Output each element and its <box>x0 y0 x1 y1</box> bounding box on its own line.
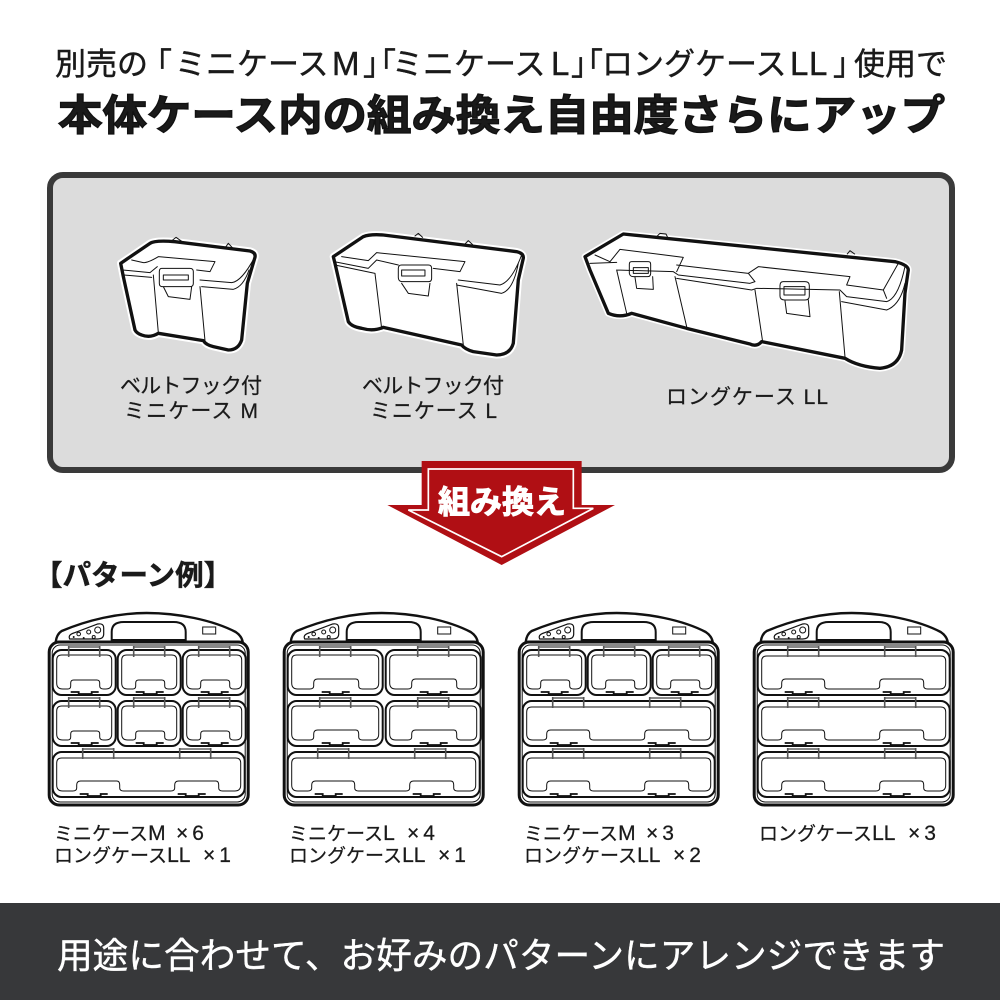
caption: pattern 2: ミニケースL <box>289 822 395 845</box>
organizer pattern 2 <box>284 613 483 805</box>
heading line: subtitle: 」 <box>363 47 394 82</box>
caption: pattern 1: ロングケースLL <box>54 844 190 867</box>
organizer pattern 4 <box>754 613 953 805</box>
heading: pattern examples: 【パターン例】 <box>34 560 232 592</box>
heading line: subtitle: 「 <box>141 47 172 82</box>
caption: pattern 3 <box>524 822 705 867</box>
caption: pattern 3: ×3 <box>646 822 678 845</box>
heading line: subtitle: L <box>790 45 808 82</box>
label: mini case L <box>362 375 504 423</box>
icon: mini case M <box>121 237 255 350</box>
organizer pattern 1 <box>49 613 248 805</box>
heading line: main title: 本体ケース内の組み換え自由度さらにアップ <box>58 92 945 139</box>
icon: mini case L <box>333 233 523 355</box>
heading line: subtitle: ミニケース <box>175 47 328 82</box>
caption: pattern 3: ロングケースLL <box>524 844 660 867</box>
label: mini case M: ベルトフック付 <box>120 375 262 398</box>
footer band <box>0 903 1000 1000</box>
caption: pattern 2: ×4 <box>407 822 439 845</box>
caption: pattern 2 <box>289 822 470 867</box>
heading line: subtitle: M <box>332 45 360 82</box>
organizer pattern 3 <box>519 613 718 805</box>
label: long case LL: ロングケース LL <box>666 386 828 409</box>
caption: pattern 1: ×6 <box>176 822 208 845</box>
heading line: subtitle: ロングケース <box>602 47 786 82</box>
heading line: subtitle: L <box>809 45 827 82</box>
caption: pattern 4: ×3 <box>908 822 940 845</box>
heading line: subtitle: 使用で <box>854 47 947 82</box>
panel: optional cases <box>50 175 952 470</box>
heading line: subtitle: ミニケース <box>392 47 545 82</box>
caption: pattern 2: ×1 <box>438 844 470 867</box>
heading line: subtitle: 「 <box>572 47 603 82</box>
heading line: subtitle: 「 <box>365 47 396 82</box>
heading line: subtitle: 別売の <box>55 47 148 82</box>
caption: pattern 1: ×1 <box>203 844 235 867</box>
label: mini case M <box>120 375 262 423</box>
arrow: rearrange: 組み換え <box>438 484 566 520</box>
caption: pattern 1: ミニケースM <box>54 822 166 845</box>
heading line: subtitle: 」 <box>571 47 602 82</box>
caption: pattern 3: ×2 <box>673 844 705 867</box>
heading line: subtitle: L <box>551 45 569 82</box>
heading line: subtitle: 」 <box>833 47 864 82</box>
label: mini case L: ベルトフック付 <box>362 375 504 398</box>
arrow: rearrange <box>387 461 615 565</box>
label: mini case M: ミニケース M <box>124 400 258 423</box>
caption: pattern 1 <box>54 822 235 867</box>
label: mini case L: ミニケース L <box>370 400 497 423</box>
caption: pattern 4: ロングケースLL <box>759 822 895 845</box>
caption: pattern 2: ロングケースLL <box>289 844 425 867</box>
footer band: 用途に合わせて、お好みのパターンにアレンジできます <box>57 935 945 976</box>
icon: long case LL <box>585 233 908 368</box>
caption: pattern 3: ミニケースM <box>524 822 636 845</box>
